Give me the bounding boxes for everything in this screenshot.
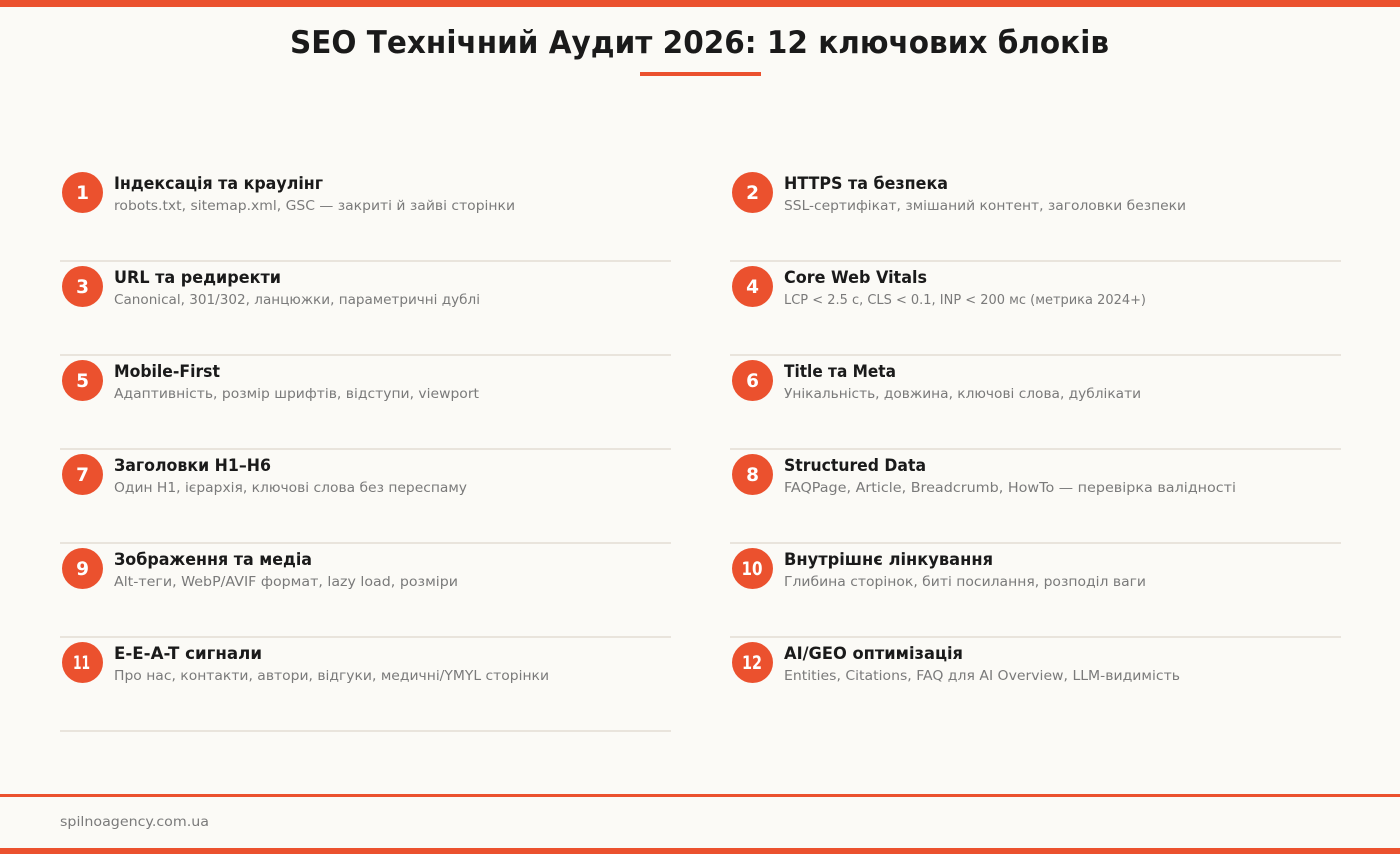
- heading 10: Внутрішнє лінкування: [784, 550, 993, 569]
- description 10: Глибина сторінок, биті посилання, розподіл ваги: [784, 574, 1146, 590]
- number badge 4: [732, 266, 773, 307]
- number badge 11: 11: [73, 653, 90, 674]
- description 9: Alt-теги, WebP/AVIF формат, lazy load, розміри: [114, 575, 458, 590]
- number badge 9: [62, 548, 103, 589]
- description 12: Entities, Citations, FAQ для AI Overview, LLM-видимість: [784, 669, 1180, 684]
- heading 6: Title та Meta: [784, 362, 896, 381]
- heading 8: Structured Data: [784, 456, 926, 475]
- heading 9: Зображення та медіа: [114, 550, 312, 569]
- number badge 9: 9: [76, 559, 89, 580]
- number badge 7: [62, 454, 103, 495]
- heading 2: HTTPS та безпека: [784, 174, 948, 193]
- heading 4: Core Web Vitals: [784, 268, 927, 287]
- item 10: Внутрішнє лінкування: [732, 548, 1146, 590]
- item 7: Заголовки H1–H6: [62, 454, 467, 496]
- number badge 6: 6: [746, 371, 759, 392]
- number badge 7: 7: [76, 465, 89, 486]
- number badge 3: [62, 266, 103, 307]
- number badge 4: 4: [746, 277, 759, 298]
- heading 12: AI/GEO оптимізація: [784, 644, 963, 663]
- item 2: HTTPS та безпека: [732, 172, 1186, 214]
- description 7: Один H1, ієрархія, ключові слова без переспаму: [114, 480, 467, 496]
- number badge 1: [62, 172, 103, 213]
- item 11: E-E-A-T сигнали: [62, 642, 549, 684]
- heading 11: E-E-A-T сигнали: [114, 644, 262, 663]
- description 2: SSL-сертифікат, змішаний контент, заголовки безпеки: [784, 198, 1186, 214]
- title: SEO Технічний Аудит 2026: 12 ключових блоків: [290, 25, 1109, 61]
- description 3: Canonical, 301/302, ланцюжки, параметричні дублі: [114, 292, 480, 308]
- description 8: FAQPage, Article, Breadcrumb, HowTo — перевірка валідності: [784, 481, 1236, 496]
- number badge 3: 3: [76, 277, 89, 298]
- item 5: Mobile-First: [62, 360, 479, 402]
- number badge 12: 12: [742, 653, 762, 674]
- item 3: URL та редиректи: [62, 266, 480, 308]
- description 4: LCP < 2.5 с, CLS < 0.1, INP < 200 мс (метрика 2024+): [784, 293, 1146, 308]
- heading 5: Mobile-First: [114, 362, 220, 381]
- item 8: Structured Data: [732, 454, 1236, 496]
- number badge 5: [62, 360, 103, 401]
- item 1: Індексація та краулінг: [62, 172, 515, 214]
- number badge 6: [732, 360, 773, 401]
- number badge 2: 2: [746, 183, 759, 204]
- item 12: AI/GEO оптимізація: [732, 642, 1180, 684]
- description 1: robots.txt, sitemap.xml, GSC — закриті й зайві сторінки: [114, 199, 515, 214]
- number badge 2: [732, 172, 773, 213]
- number badge 8: 8: [746, 465, 759, 486]
- number badge 5: 5: [76, 371, 89, 392]
- top accent bar: [0, 0, 1400, 7]
- item 4: Core Web Vitals: [732, 266, 1146, 308]
- title underline: [640, 72, 761, 76]
- footer website text: spilnoagency.com.ua: [60, 814, 209, 830]
- number badge 11: [62, 642, 103, 683]
- footer rule: [0, 794, 1400, 797]
- heading 3: URL та редиректи: [114, 268, 281, 287]
- number badge 10: [732, 548, 773, 589]
- number badge 12: [732, 642, 773, 683]
- description 11: Про нас, контакти, автори, відгуки, медичні/YMYL сторінки: [114, 669, 549, 684]
- heading 7: Заголовки H1–H6: [114, 456, 271, 475]
- number badge 10: 10: [742, 559, 762, 580]
- number badge 8: [732, 454, 773, 495]
- item 9: Зображення та медіа: [62, 548, 458, 590]
- item 6: Title та Meta: [732, 360, 1141, 402]
- description 5: Адаптивність, розмір шрифтів, відступи, viewport: [114, 387, 479, 402]
- bottom accent bar: [0, 848, 1400, 854]
- heading 1: Індексація та краулінг: [114, 174, 323, 193]
- number badge 1: 1: [76, 183, 89, 204]
- description 6: Унікальність, довжина, ключові слова, дублікати: [784, 386, 1141, 402]
